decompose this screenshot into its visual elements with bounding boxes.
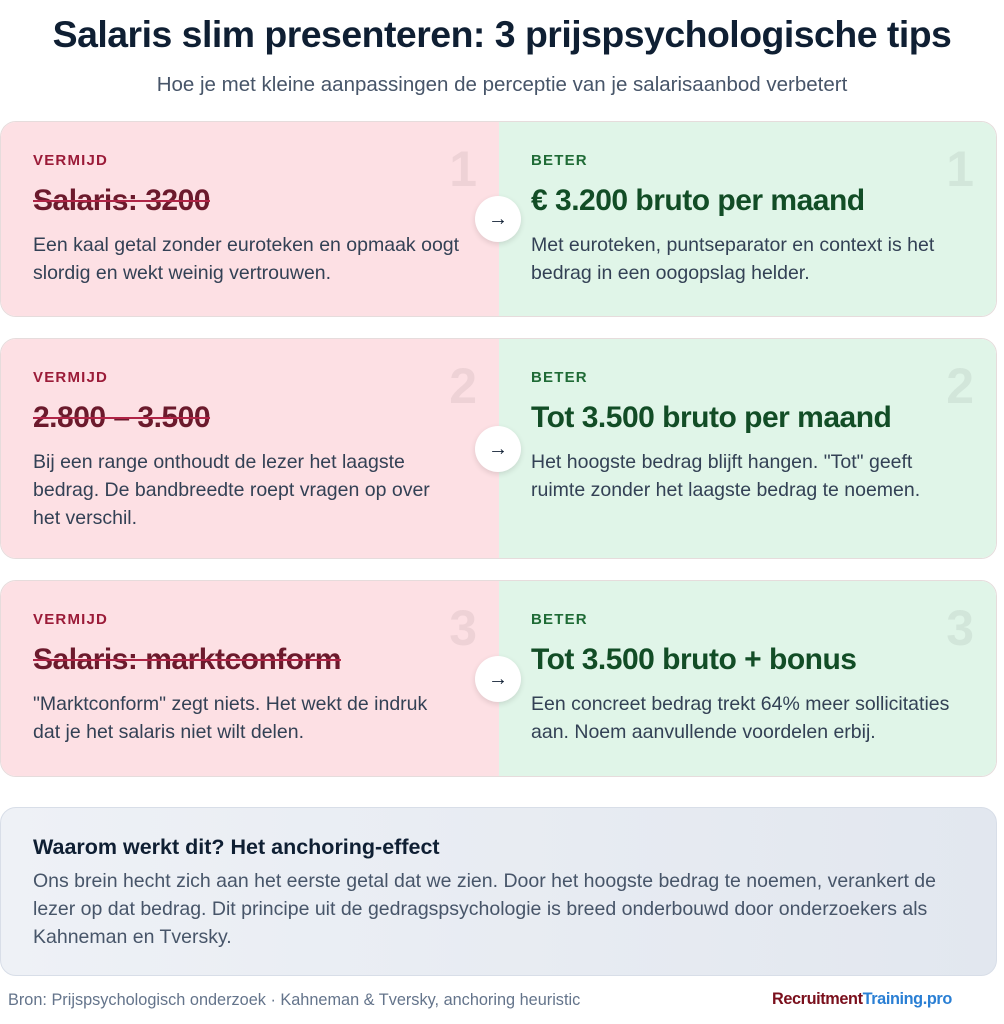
better side 3	[499, 581, 996, 776]
avoid side 1	[1, 122, 499, 316]
better side 2: 2	[946, 358, 974, 414]
better side 1: Met euroteken, puntseparator en context is het bedrag in een oogopslag helder.	[531, 234, 934, 284]
better side 1: € 3.200 bruto per maand	[531, 184, 865, 217]
avoid side 3	[1, 581, 499, 776]
heading: Waarom werkt dit? Het anchoring-effect	[33, 835, 440, 859]
better side 3: Een concreet bedrag trekt 64% meer sollicitaties aan. Noem aanvullende voordelen erbij.	[531, 693, 949, 743]
panel: tip 3	[0, 580, 997, 777]
title: Salaris slim presenteren: 3 prijspsychologische tips	[53, 13, 951, 55]
panel: tip 2	[0, 338, 997, 559]
arrow 3	[475, 656, 521, 702]
avoid side 3: "Marktconform" zegt niets. Het wekt de indruk dat je het salaris niet wilt delen.	[33, 693, 427, 743]
avoid side 3: VERMIJD	[33, 611, 108, 628]
avoid side 2: VERMIJD	[33, 369, 108, 386]
avoid side 2	[1, 339, 499, 558]
panel: tip 1	[0, 121, 997, 317]
logo: RecruitmentTraining.pro	[772, 990, 952, 1008]
subtitle: Hoe je met kleine aanpassingen de perceptie van je salarisaanbod verbetert	[157, 73, 847, 96]
avoid side 1: Salaris: 3200	[33, 184, 210, 217]
arrow 2: →	[488, 438, 508, 460]
better side 1: 1	[946, 141, 974, 197]
better side 3: Tot 3.500 bruto + bonus	[531, 643, 856, 676]
better side 2: BETER	[531, 369, 588, 386]
better side 3: BETER	[531, 611, 588, 628]
arrow 1	[475, 196, 521, 242]
avoid side 2: Bij een range onthoudt de lezer het laagste bedrag. De bandbreedte roept vragen op over het verschil.	[33, 451, 430, 529]
better side 1: BETER	[531, 152, 588, 169]
body text: Ons brein hecht zich aan het eerste getal dat we zien. Door het hoogste bedrag te noemen, verankert de lezer op dat bedrag. Dit principe uit de gedragspsychologie is breed onderbouwd door onderzoekers als Kahneman en Tversky.	[33, 870, 936, 948]
better side 1	[499, 122, 996, 316]
avoid side 3: 3	[449, 600, 477, 656]
arrow 1: →	[488, 208, 508, 230]
panel: anchoring explanation	[0, 807, 997, 976]
arrow 2	[475, 426, 521, 472]
avoid side 1: 1	[449, 141, 477, 197]
avoid side 1: VERMIJD	[33, 152, 108, 169]
better side 2: Tot 3.500 bruto per maand	[531, 401, 891, 434]
source: Bron: Prijspsychologisch onderzoek · Kahneman & Tversky, anchoring heuristic	[8, 991, 580, 1009]
avoid side 2: 2.800 – 3.500	[33, 401, 210, 434]
better side 2	[499, 339, 996, 558]
avoid side 3: Salaris: marktconform	[33, 643, 341, 676]
avoid side 2: 2	[449, 358, 477, 414]
better side 2: Het hoogste bedrag blijft hangen. "Tot" geeft ruimte zonder het laagste bedrag te noemen.	[531, 451, 920, 501]
avoid side 1: Een kaal getal zonder euroteken en opmaak oogt slordig en wekt weinig vertrouwen.	[33, 234, 459, 284]
better side 3: 3	[946, 600, 974, 656]
arrow 3: →	[488, 668, 508, 690]
